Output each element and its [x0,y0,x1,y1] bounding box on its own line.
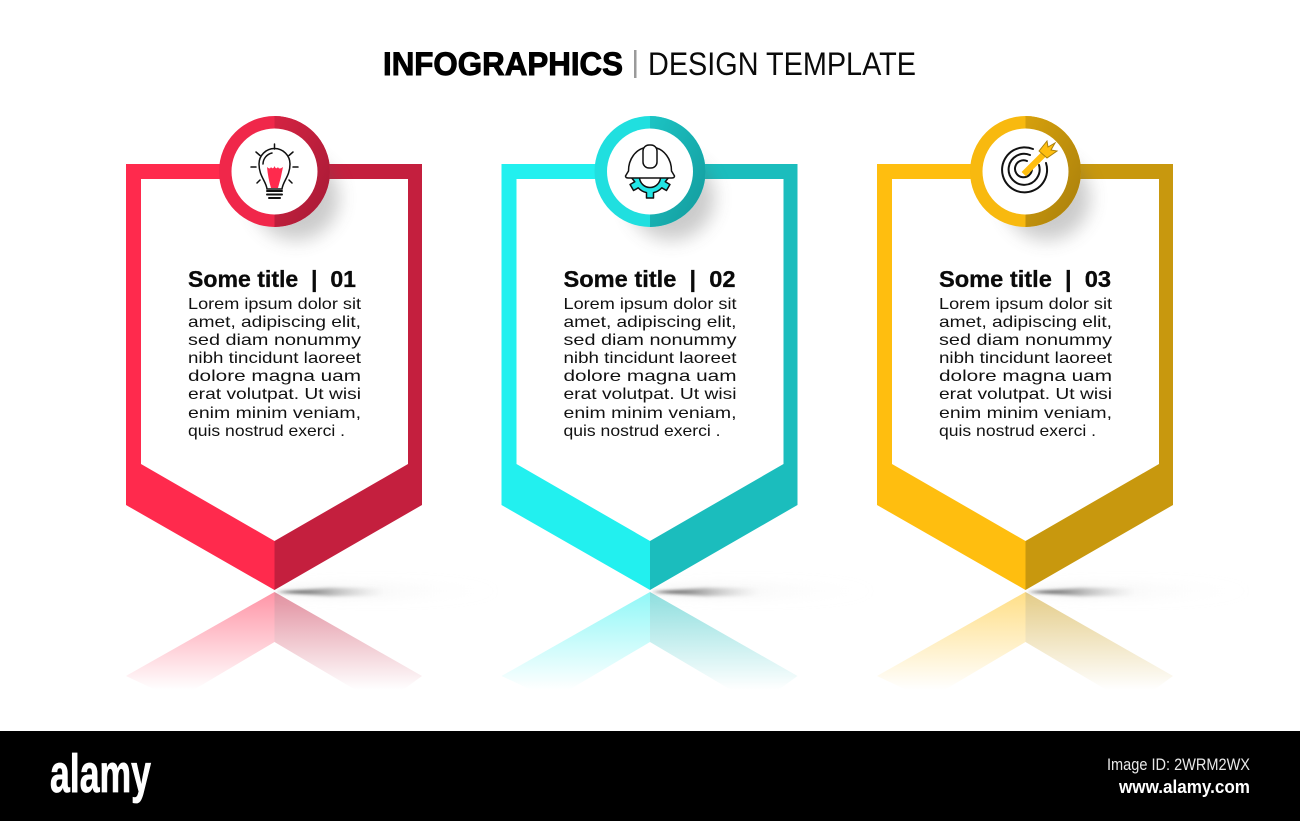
text: card 02: quis nostrud exerci . [564,423,720,440]
title: INFOGRAPHICS [383,46,623,82]
text: card 02: sed diam nonummy [564,332,736,349]
reflection: card 03 [877,592,1173,692]
text: card 02: Some title | 02 [564,266,736,292]
text: card 03: amet, adipiscing elit, [939,314,1112,331]
reflection: card 02 [502,592,798,692]
text: card 01: nibh tincidunt laoreet [188,350,362,367]
icon: helmet and gear [626,145,674,198]
text: card 01: quis nostrud exerci . [188,423,345,440]
badge: card 02 [594,116,714,240]
text: card 02 [564,266,737,440]
text: card 02: amet, adipiscing elit, [564,314,736,331]
text: card 02: nibh tincidunt laoreet [564,350,737,367]
badge: card 01 [219,116,339,240]
reflection: card 01 [126,592,422,692]
floor shadow: card 02 [652,582,876,600]
frame: card 01 [126,164,422,590]
panel: card 02 [502,116,876,692]
icon: light bulb [251,144,298,198]
text: card 01: dolore magna uam [188,368,361,385]
panel: card 03 [877,116,1251,692]
text: card 03: Lorem ipsum dolor sit [939,296,1113,313]
text: card 01: Some title | 01 [188,266,356,292]
text: card 03: erat volutpat. Ut wisi [939,386,1112,403]
title: DESIGN TEMPLATE [648,46,916,82]
text: card 03: Some title | 03 [939,266,1111,292]
text: card 02: enim minim veniam, [564,405,736,422]
frame: card 03 [877,164,1173,590]
image id: Image ID: 2WRM2WX [1107,755,1250,774]
badge: card 03 [970,116,1090,240]
text: card 03: enim minim veniam, [939,405,1112,422]
text: card 03 [939,266,1113,440]
floor shadow: card 03 [1027,582,1251,600]
icon: target with arrow [1002,141,1057,192]
floor shadow: card 01 [276,582,500,600]
text: card 01: sed diam nonummy [188,332,361,349]
footer bar [0,731,1300,821]
text: card 02: Lorem ipsum dolor sit [564,296,737,313]
text: card 02: erat volutpat. Ut wisi [564,386,736,403]
text: card 01 [188,266,362,440]
text: card 02: dolore magna uam [564,368,736,385]
website: www.alamy.com [1118,777,1250,797]
title [383,46,916,82]
logo: alamy [50,744,151,804]
panel: card 01 [126,116,500,692]
text: card 03: quis nostrud exerci . [939,423,1096,440]
text: card 01: Lorem ipsum dolor sit [188,296,362,313]
text: card 01: amet, adipiscing elit, [188,314,361,331]
text: card 01: enim minim veniam, [188,405,361,422]
text: card 01: erat volutpat. Ut wisi [188,386,361,403]
text: card 03: dolore magna uam [939,368,1112,385]
text: card 03: sed diam nonummy [939,332,1112,349]
text: card 03: nibh tincidunt laoreet [939,350,1113,367]
frame: card 02 [502,164,798,590]
